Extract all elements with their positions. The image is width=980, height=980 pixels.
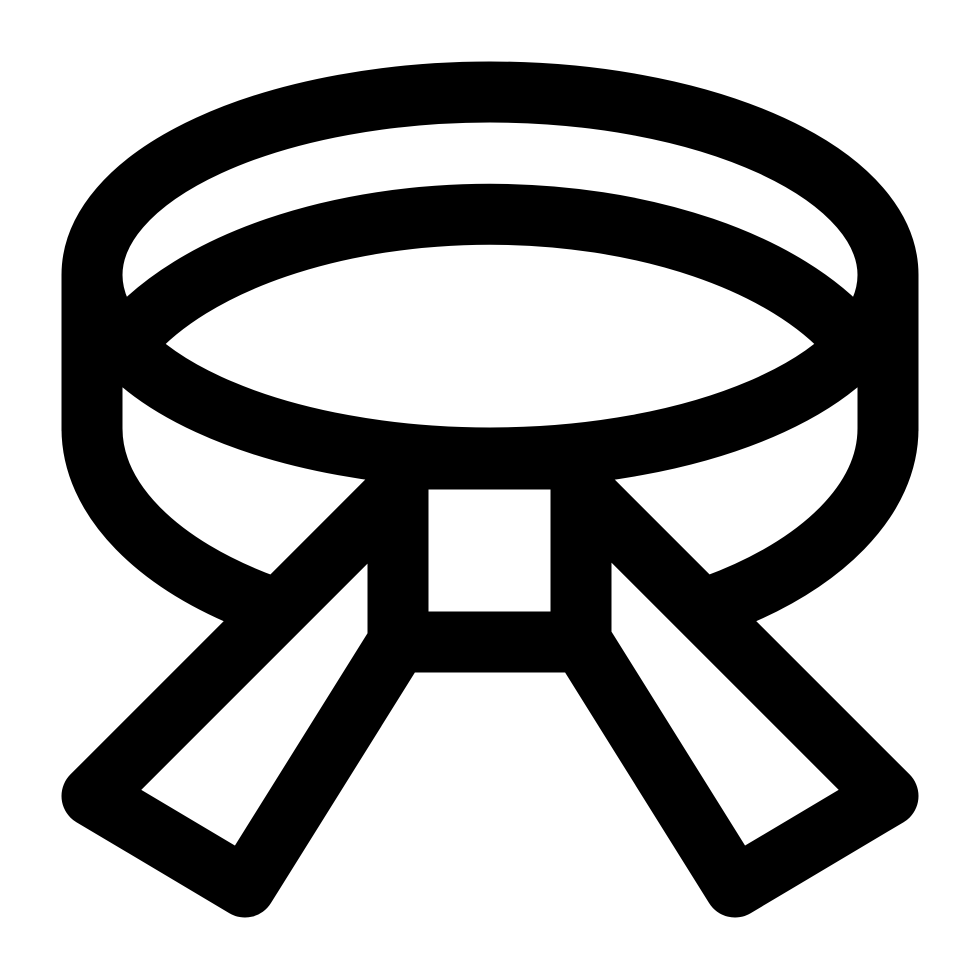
right belt tail xyxy=(582,490,888,887)
belt knot xyxy=(398,459,581,642)
left belt tail xyxy=(92,490,398,887)
belt loop: top ellipse xyxy=(92,92,888,458)
belt loop: band sides and lower ellipse xyxy=(92,214,888,605)
